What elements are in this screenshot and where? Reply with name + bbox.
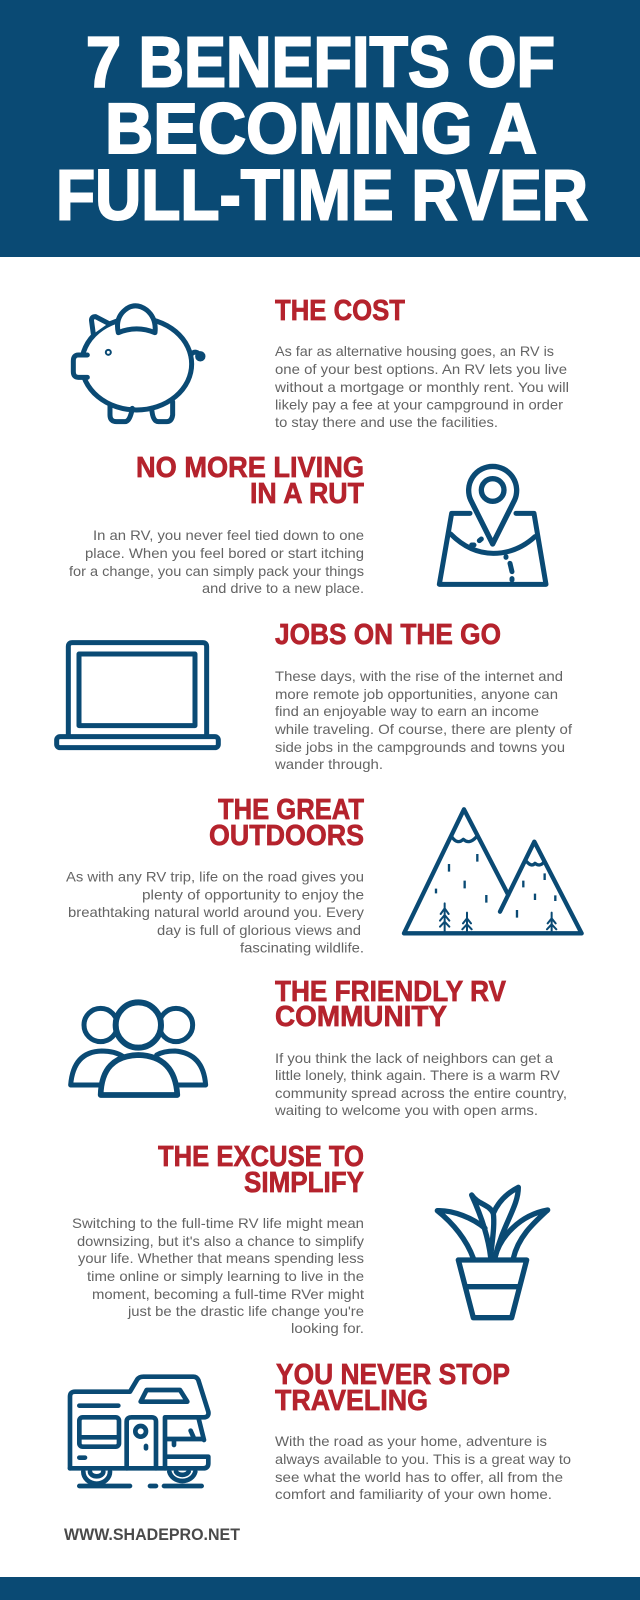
section: the cost: one of your best options. An RV lets you live	[275, 361, 567, 377]
section: the excuse to simplify: SIMPLIFY	[244, 1167, 364, 1199]
footer bar	[0, 1577, 640, 1600]
section: jobs on the go: more remote job opportunities, anyone can	[275, 686, 558, 702]
section: no more living in a rut: and drive to a new place.	[202, 580, 364, 596]
section: jobs on the go: find an enjoyable way to earn an income	[275, 703, 539, 719]
section: no more living in a rut: place. When you feel bored or start itching	[85, 545, 364, 561]
section: the excuse to simplify: your life. Whether that means spending less	[78, 1250, 364, 1266]
section: you never stop traveling: YOU NEVER STOP	[276, 1359, 510, 1391]
section: the great outdoors: day is full of glorious views and	[157, 922, 361, 938]
section: the excuse to simplify: looking for.	[291, 1320, 364, 1336]
section: the friendly rv community: community spread across the entire country,	[275, 1085, 567, 1101]
section: the friendly rv community	[274, 976, 567, 1118]
section: the great outdoors: OUTDOORS	[209, 820, 364, 852]
section: the excuse to simplify: moment, becoming a full-time RVer might	[92, 1286, 364, 1302]
title	[56, 24, 588, 236]
icon: group of people	[71, 1002, 206, 1095]
section: jobs on the go: These days, with the rise of the internet and	[275, 668, 563, 684]
section: no more living in a rut: IN A RUT	[250, 478, 364, 510]
section: the friendly rv community: If you think the lack of neighbors can get a	[275, 1050, 553, 1066]
section: jobs on the go: side jobs in the campgrounds and towns you	[275, 739, 565, 755]
section: the friendly rv community: COMMUNITY	[275, 1001, 447, 1033]
icon: piggy bank	[73, 306, 203, 422]
section: you never stop traveling: always available to you. This is a great way to	[275, 1451, 571, 1467]
website url: WWW.SHADEPRO.NET	[64, 1526, 240, 1544]
header banner	[0, 0, 640, 257]
section: the friendly rv community: waiting to welcome you with open arms.	[274, 1102, 538, 1118]
section: the friendly rv community: little lonely, think again. There is a warm RV	[275, 1067, 561, 1083]
section: the great outdoors: THE GREAT	[218, 794, 364, 826]
title: 7 BENEFITS OF	[86, 24, 555, 102]
section: jobs on the go: wander through.	[274, 756, 383, 772]
section: the excuse to simplify: time online or simply learning to live in the	[87, 1268, 364, 1284]
section: you never stop traveling	[275, 1359, 571, 1502]
section: the cost: THE COST	[275, 295, 405, 327]
section: the cost: As far as alternative housing goes, an RV is	[275, 343, 554, 359]
section: you never stop traveling: see what the world has to offer, all from the	[275, 1469, 563, 1485]
title: BECOMING A	[105, 90, 537, 169]
icon: map with pin	[439, 466, 546, 584]
section: you never stop traveling: With the road as your home, adventure is	[275, 1433, 547, 1449]
title: FULL-TIME RVER	[56, 156, 588, 236]
section: the great outdoors: fascinating wildlife.	[240, 940, 364, 956]
icon: camper van	[70, 1377, 208, 1486]
section: jobs on the go: while traveling. Of course, there are plenty of	[274, 721, 572, 737]
section: the cost: to stay there and use the facilities.	[275, 414, 498, 430]
section: the cost: without a mortgage or monthly rent. You will	[274, 379, 569, 395]
section: the friendly rv community: THE FRIENDLY RV	[275, 976, 507, 1008]
section: the great outdoors: As with any RV trip, life on the road gives you	[66, 868, 364, 884]
section: no more living in a rut: NO MORE LIVING	[136, 452, 364, 484]
section: no more living in a rut	[69, 452, 364, 596]
section: the cost: likely pay a fee at your campground in order	[275, 396, 563, 412]
section: jobs on the go	[274, 619, 572, 772]
section: the great outdoors: breathtaking natural world around you. Every	[68, 904, 364, 920]
section: the excuse to simplify: THE EXCUSE TO	[158, 1141, 364, 1173]
section: the cost	[274, 295, 569, 430]
section: the great outdoors: plenty of opportunity to enjoy the	[142, 886, 364, 902]
section: the excuse to simplify: Switching to the full-time RV life might mean	[72, 1215, 364, 1231]
section: the excuse to simplify: just be the drastic life change you're	[127, 1303, 364, 1319]
icon: mountains	[404, 809, 582, 933]
section: jobs on the go: JOBS ON THE GO	[275, 619, 501, 651]
icon: potted plant	[437, 1187, 548, 1318]
icon: laptop	[57, 643, 218, 748]
section: no more living in a rut: for a change, you can simply pack your things	[69, 563, 364, 579]
section: you never stop traveling: comfort and familiarity of your own home.	[275, 1486, 552, 1502]
section: the great outdoors	[66, 794, 364, 956]
section: you never stop traveling: TRAVELING	[275, 1385, 428, 1417]
section: the excuse to simplify	[72, 1141, 364, 1336]
section: the excuse to simplify: downsizing, but it's also a chance to simplify	[77, 1233, 364, 1249]
section: no more living in a rut: In an RV, you never feel tied down to one	[93, 527, 364, 543]
